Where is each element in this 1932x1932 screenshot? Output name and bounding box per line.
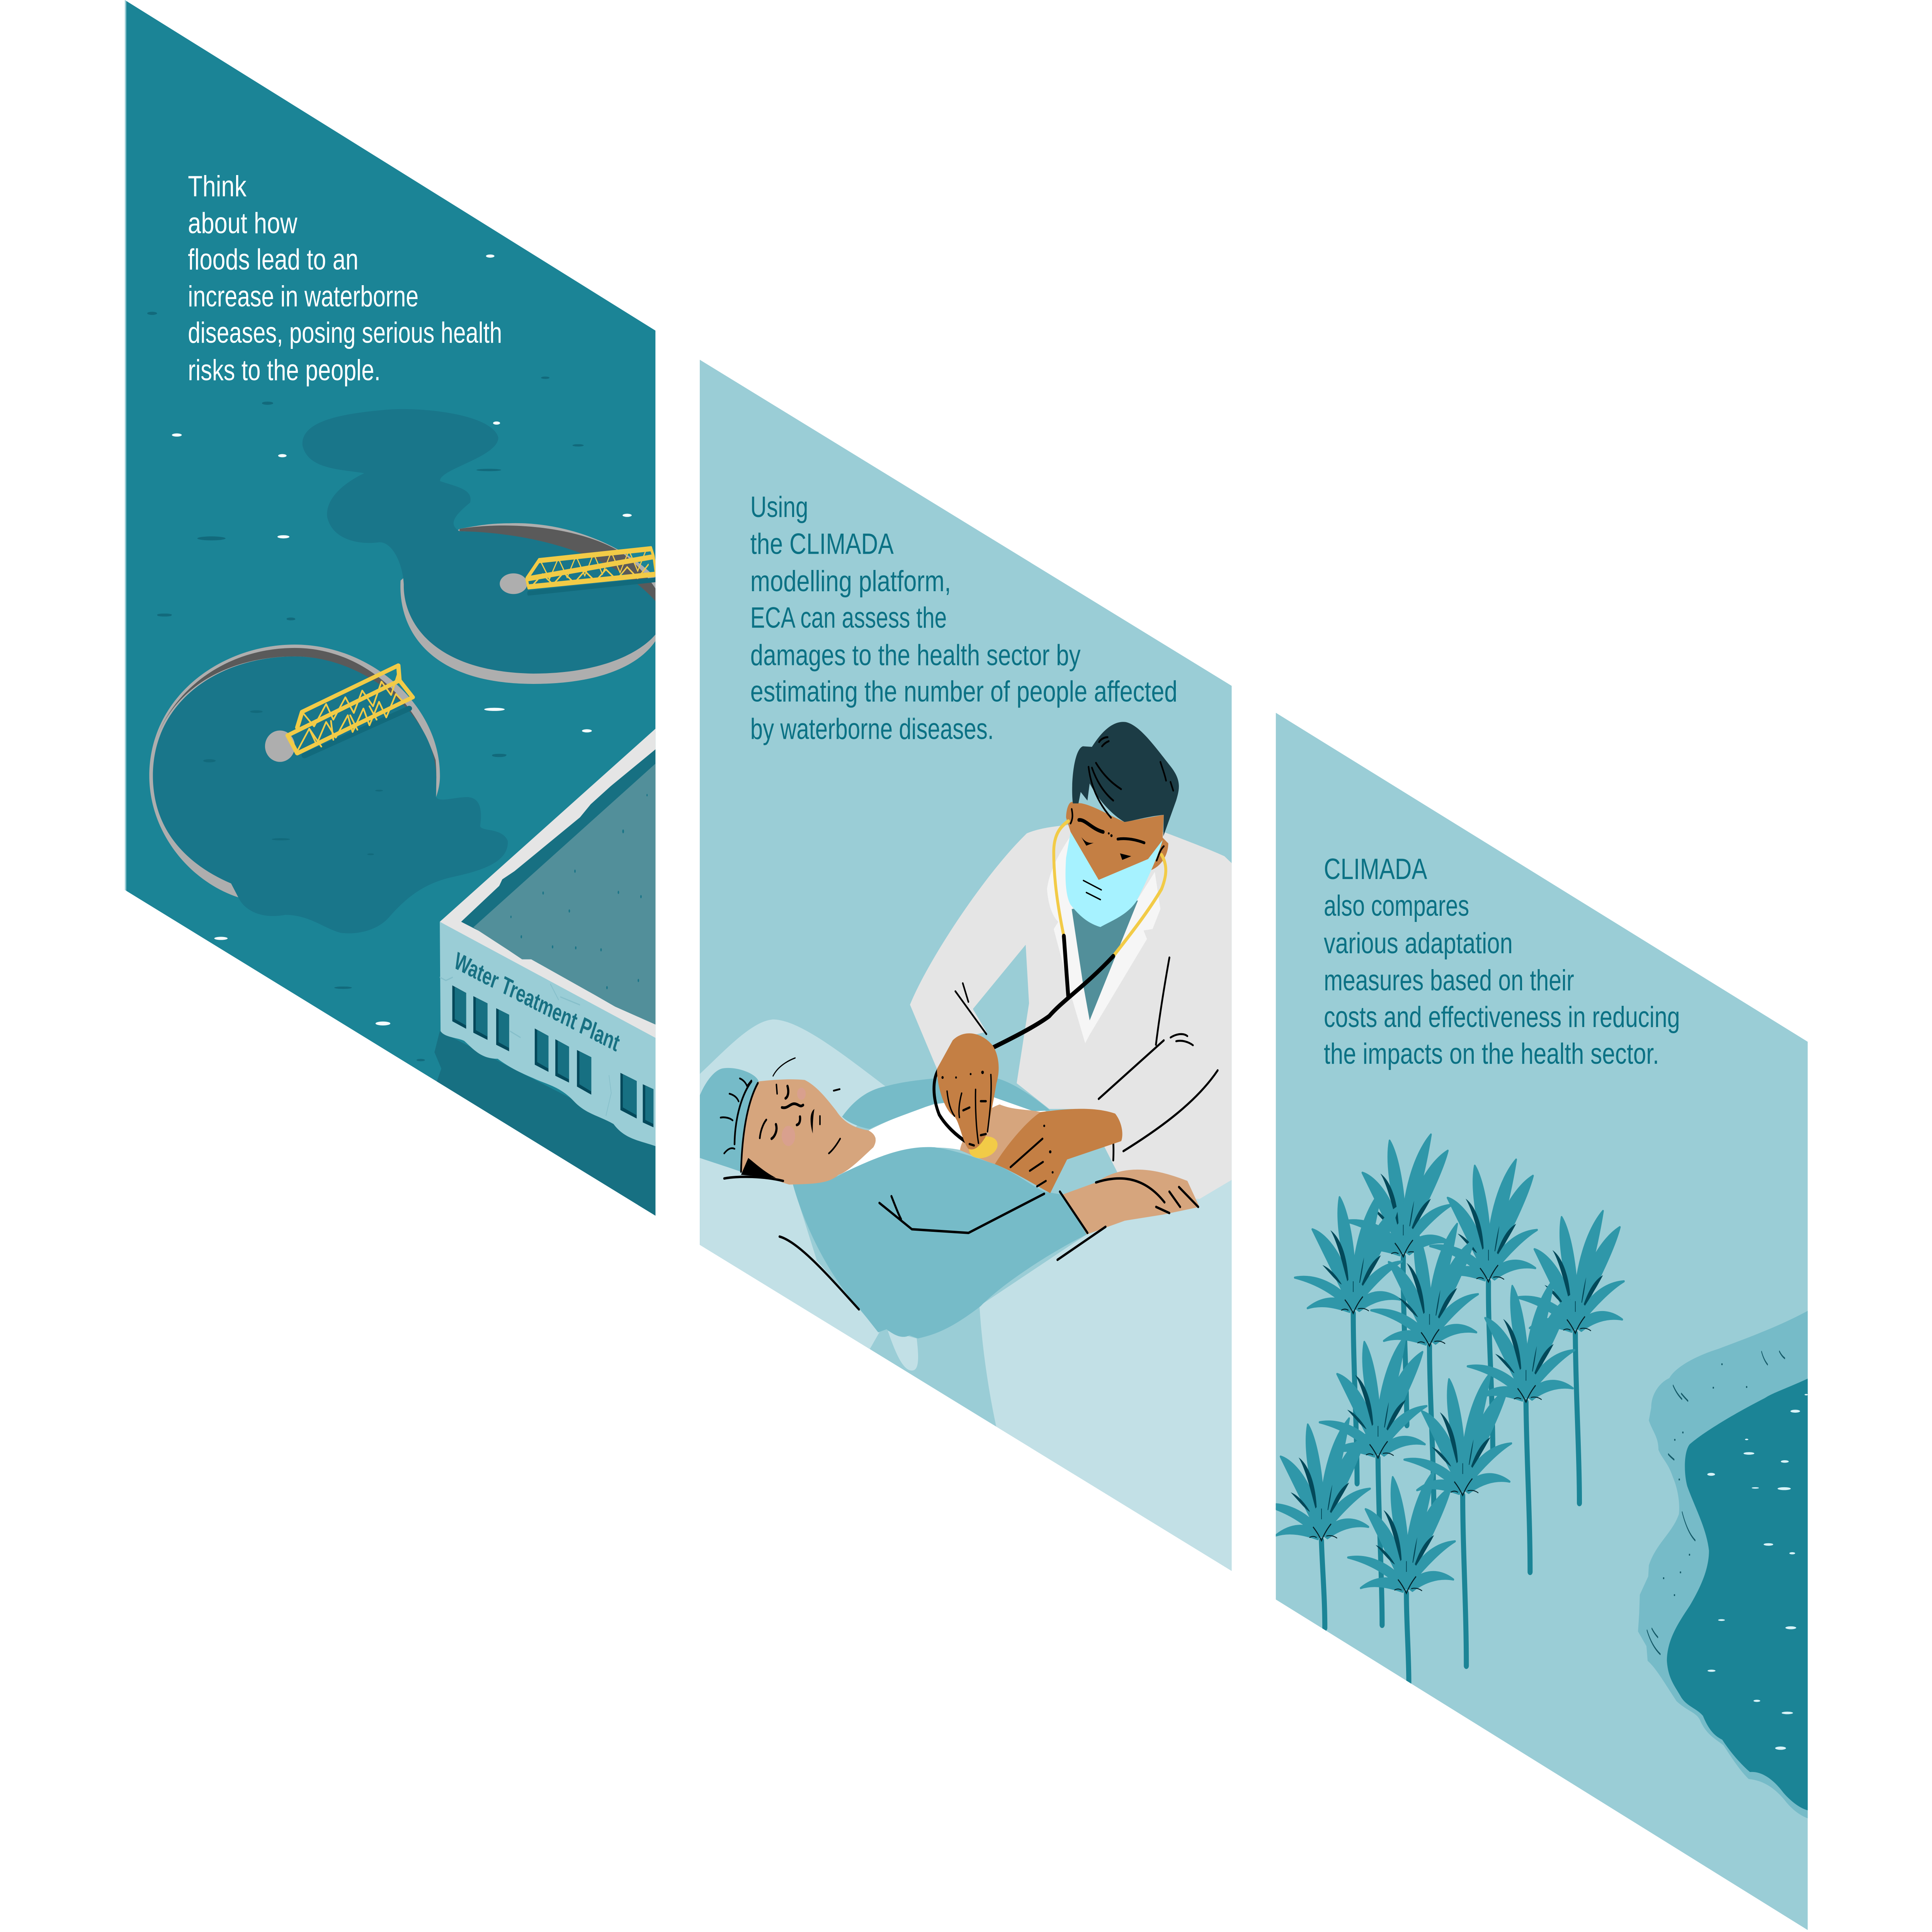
doctor lower hand (995, 1109, 1122, 1193)
stethoscope (993, 821, 1166, 1048)
text: assessing health sector damages: modelling platform, (750, 565, 951, 598)
doctor upper hand with stethoscope (934, 1033, 999, 1150)
text: floods and waterborne diseases (188, 170, 502, 387)
patient hair (741, 1158, 776, 1178)
text: assessing health sector damages: damages to the health sector by (750, 638, 1081, 672)
bed and pillow (700, 1019, 918, 1371)
yellow bridge on tank 2 (527, 549, 656, 593)
text: floods and waterborne diseases: Think (188, 170, 247, 203)
text: comparing adaptation measures: also compares (1324, 889, 1469, 922)
text: floods and waterborne diseases: floods lead to an (188, 243, 359, 276)
text: comparing adaptation measures: various adaptation (1324, 927, 1513, 960)
patient (700, 1058, 1199, 1338)
water treatment plant building (428, 725, 659, 1222)
yellow bridge on tank 1 (287, 665, 413, 755)
face mask (1066, 832, 1163, 927)
panel: adaptation measures (1263, 713, 1809, 1930)
sea water (1667, 1378, 1809, 1811)
text: comparing adaptation measures: CLIMADA (1324, 852, 1427, 886)
panel: doctor treating patient (700, 360, 1233, 1573)
text: assessing health sector damages: by waterborne diseases. (750, 713, 994, 745)
text: assessing health sector damages: ECA can assess the (750, 601, 947, 634)
chest (960, 1104, 1041, 1164)
text: floods and waterborne diseases: diseases, posing serious health (188, 316, 502, 349)
scrubs (1072, 900, 1138, 1020)
white undershirt (838, 1095, 1053, 1175)
windows (452, 985, 653, 1127)
treatment tank 1 with flood spill (149, 614, 508, 933)
text: comparing adaptation measures: measures based on their (1324, 964, 1574, 997)
hair (1072, 722, 1179, 836)
palm trees (1263, 1134, 1624, 1683)
panel: floods at water treatment plant (125, 0, 664, 1222)
text: assessing health sector damages (750, 490, 1177, 745)
surgical cap (700, 1068, 759, 1172)
hospital gown (793, 1147, 1087, 1338)
text: assessing health sector damages: the CLIMADA (750, 527, 894, 560)
stethoscope chest piece (968, 1133, 999, 1161)
coat lapels (1047, 838, 1160, 1043)
patient face (741, 1079, 876, 1185)
white coat (910, 825, 1233, 1199)
coat lines (955, 957, 1218, 1160)
text: floods and waterborne diseases: about how (188, 206, 298, 240)
text: floods and waterborne diseases: increase in waterborne (188, 280, 418, 313)
building sign: Water Treatment Plant (451, 947, 623, 1056)
text: comparing adaptation measures (1324, 852, 1680, 1070)
treatment tank 2 with flood spill (303, 409, 664, 684)
patient arm (1062, 1170, 1199, 1235)
doctor (910, 722, 1233, 1199)
text: assessing health sector damages: Using (750, 490, 808, 524)
facial details (1071, 737, 1173, 900)
shoreline and sea (1638, 1310, 1809, 1819)
doctor face (1066, 802, 1168, 880)
water ripples (147, 255, 632, 1061)
sand marks (1647, 1351, 1785, 1654)
text: comparing adaptation measures: the impacts on the health sector. (1324, 1037, 1659, 1070)
text: comparing adaptation measures: costs and effectiveness in reducing (1324, 1000, 1680, 1034)
text: assessing health sector damages: estimating the number of people affected (750, 675, 1177, 708)
patient lines (721, 1058, 1198, 1310)
sea highlights (1707, 1394, 1808, 1750)
text: floods and waterborne diseases: risks to the people. (188, 354, 381, 387)
sand (1638, 1310, 1809, 1819)
